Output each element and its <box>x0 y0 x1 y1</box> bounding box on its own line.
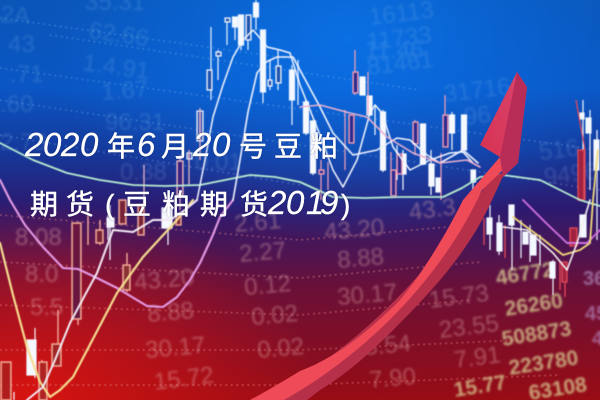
title line 1: 6 <box>137 126 156 163</box>
background market numbers: 0.02 <box>256 333 305 364</box>
title line 1: 2 <box>60 126 79 163</box>
background market numbers: .71 <box>10 61 43 88</box>
title line 1: 月 <box>161 131 189 162</box>
title line 2: 9 <box>320 184 338 221</box>
background market numbers: 15.72 <box>152 362 215 396</box>
background market numbers: 9496 <box>542 158 599 191</box>
background market numbers: 2A <box>0 1 31 30</box>
background market numbers: 43.3 <box>407 193 457 226</box>
background market numbers: 516 <box>537 134 580 166</box>
line: white right average <box>503 200 590 270</box>
background market numbers: 96 <box>462 101 492 131</box>
title line 2: ( <box>105 189 115 220</box>
background market numbers: 0.01 <box>195 149 242 176</box>
candles: right cluster <box>487 100 599 295</box>
arrow shaft: bright upper band <box>250 157 503 400</box>
background market numbers: 11.46 <box>365 37 423 64</box>
background market numbers: 43 <box>8 31 35 58</box>
title line 2: 货 <box>66 189 94 220</box>
background market numbers: 30.17 <box>336 279 398 311</box>
background market numbers: 81461 <box>365 46 435 81</box>
title line 2: 1 <box>306 184 324 221</box>
rising red arrow <box>250 72 527 400</box>
background market numbers: 31716 <box>442 73 512 108</box>
background market numbers: 508873 <box>500 317 573 351</box>
arrow head <box>480 72 527 177</box>
arrow head shaded facet <box>500 72 527 177</box>
line: pale pink average <box>300 105 480 167</box>
background market numbers: 30.17 <box>144 332 206 364</box>
candles: centre band <box>304 77 476 195</box>
title line 1: 豆 <box>274 131 302 162</box>
background market numbers: 23.55 <box>437 310 500 344</box>
background market numbers: .60 <box>0 91 33 118</box>
background market numbers: 2.61 <box>233 207 282 238</box>
background market numbers: 43.20 <box>323 214 385 246</box>
title <box>24 126 350 221</box>
candles: blue zone, upper centre <box>187 0 298 159</box>
background market numbers: 0.12 <box>243 270 292 301</box>
background market numbers: 1.4.91 <box>81 49 151 85</box>
line: pale rising continuation <box>233 57 478 200</box>
candles: lower left <box>1 200 181 400</box>
background market numbers: 96.31 <box>105 109 165 136</box>
title line 1: 号 <box>239 131 267 162</box>
title line 1: 0 <box>212 126 231 163</box>
background market numbers: 15.73 <box>427 280 490 314</box>
line: yellow average <box>0 200 193 397</box>
background market numbers: 7.91 <box>452 341 502 374</box>
arrow shaft: dark lower band <box>262 172 505 400</box>
title line 1: 2 <box>24 126 43 163</box>
title line 2: 0 <box>286 184 305 221</box>
background market numbers: 11733 <box>365 21 433 56</box>
background market numbers: 46772 <box>494 258 555 290</box>
background market numbers: 62.66 <box>87 17 150 52</box>
background market numbers: 26260 <box>503 289 564 321</box>
background market numbers: 2.73 <box>0 129 47 156</box>
line: white average lower <box>27 200 197 400</box>
line: purple right average <box>523 200 600 243</box>
title line 1: 粕 <box>310 131 338 162</box>
background market numbers: 8.88 <box>146 297 195 328</box>
background market numbers: 3.54 <box>363 330 412 361</box>
title line 2: 期 <box>200 189 228 220</box>
background market numbers: 8.88 <box>336 243 385 274</box>
line: white tall rise <box>197 30 473 200</box>
title line 2: 货 <box>240 189 268 220</box>
background market numbers: 0.38 <box>120 159 167 186</box>
title line 2: 2 <box>267 184 286 221</box>
background market numbers: 5.5 <box>30 294 63 321</box>
background market numbers: 8.0 <box>25 261 58 288</box>
title line 1: 0 <box>43 126 62 163</box>
title line 1: 年 <box>107 131 135 162</box>
background market numbers: 223780 <box>507 346 580 380</box>
background market numbers: 1.67 <box>101 76 149 106</box>
line: yellow right average <box>513 150 598 255</box>
background market numbers: 8.08 <box>15 224 62 251</box>
background market numbers: 7.90 <box>368 363 417 394</box>
title line 1: 0 <box>80 126 99 163</box>
title line 2: 期 <box>30 189 58 220</box>
line: pale green average <box>0 143 600 206</box>
background market numbers: 43.20 <box>133 264 195 296</box>
title line 2: ) <box>341 189 350 220</box>
title line 2: 豆 <box>123 189 151 220</box>
title line 1: 2 <box>192 126 211 163</box>
background market numbers: 0.02 <box>250 300 299 331</box>
line: lilac average left <box>0 180 233 307</box>
background market numbers: 2.27 <box>238 237 287 268</box>
title line 2: 粕 <box>162 189 190 220</box>
